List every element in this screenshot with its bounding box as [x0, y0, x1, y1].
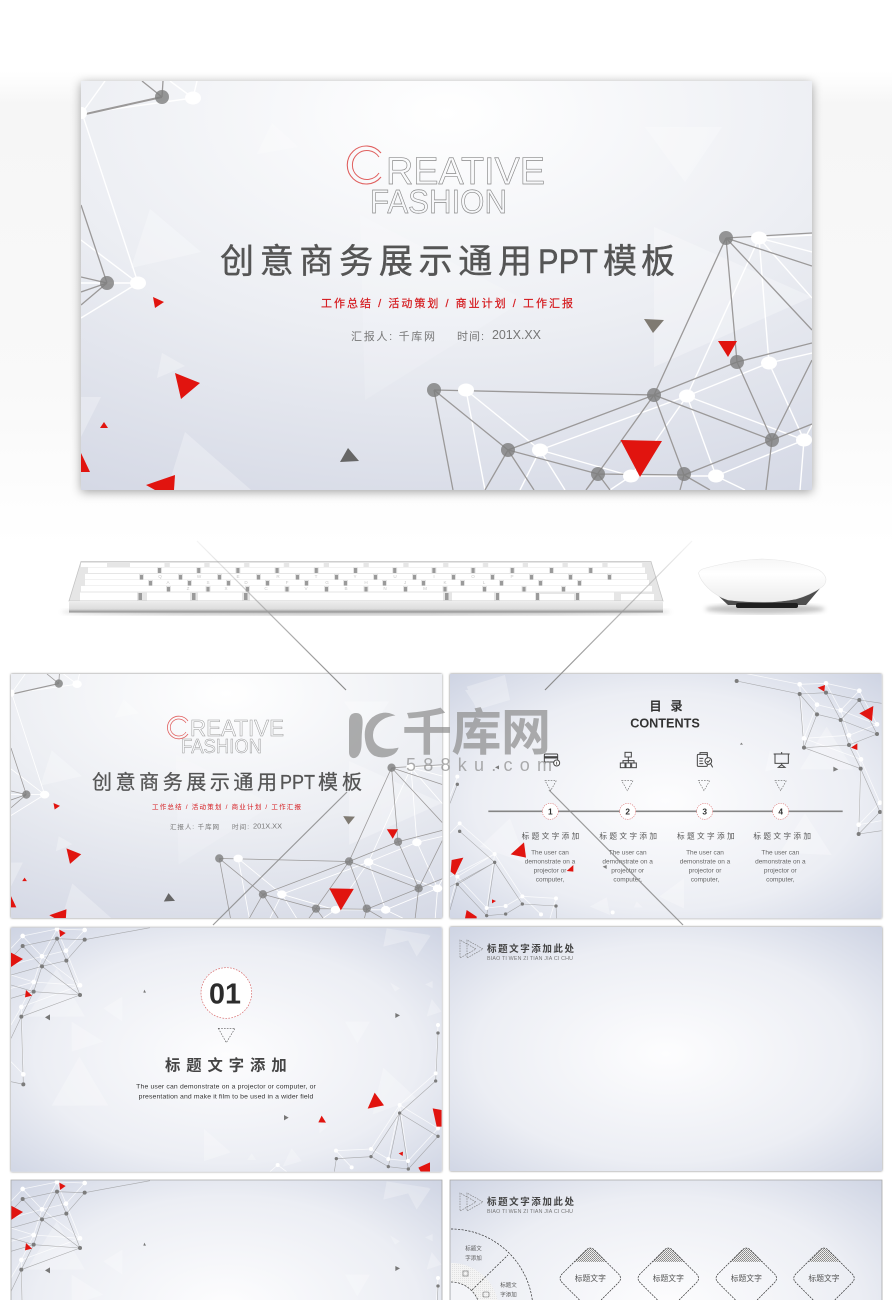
- step descriptions: The user can: [609, 849, 647, 856]
- step headings: [522, 831, 811, 841]
- key labels: J: [404, 580, 406, 585]
- step descriptions: demonstrate on a: [680, 858, 731, 865]
- panel: main cover slide: [77, 81, 812, 490]
- diamond cards: 标题文字: [731, 1273, 762, 1283]
- key labels: F: [286, 580, 289, 585]
- key labels: S: [206, 580, 210, 585]
- fan diagram: [451, 1229, 532, 1300]
- key labels: W: [197, 574, 202, 579]
- logo: Creative Fashion: REATIVE: [386, 151, 545, 193]
- diamond cards: 标题文字: [808, 1273, 840, 1283]
- watermark: [349, 705, 552, 775]
- thumbnail title: [92, 771, 362, 794]
- step descriptions: demonstrate on a: [525, 858, 576, 865]
- timeline: 3: [702, 806, 707, 816]
- key labels: I: [433, 574, 435, 579]
- watermark line right upper: [545, 541, 692, 690]
- section number: 01: [209, 979, 241, 1011]
- thumbnail reporter and date: 201X.XX: [253, 822, 282, 830]
- thumbnail subtitle: 工作总结 / 活动策划 / 商业计划 / 工作汇报: [152, 802, 302, 811]
- title: [220, 243, 675, 281]
- thumbnail artwork: [9, 674, 442, 918]
- contents heading: 目录: [649, 699, 683, 713]
- key labels: G: [325, 580, 329, 585]
- reporter and date: [351, 328, 542, 343]
- network background artwork: [77, 81, 812, 490]
- key labels: Y: [353, 574, 357, 579]
- dashed triangle markers: [545, 781, 786, 791]
- watermark line left lower: [213, 792, 347, 925]
- illustration: mouse: [698, 559, 826, 614]
- icon: double triangle: [460, 1193, 483, 1211]
- key labels: L: [483, 580, 486, 585]
- thumbnail logo: [167, 715, 284, 758]
- fan diagram: 字添加: [500, 1290, 517, 1298]
- panel: thumbnail cover slide: [9, 674, 442, 918]
- panel: section 01 slide: [11, 927, 442, 1172]
- top border: [11, 1180, 442, 1300]
- icon: presentation screen: [774, 752, 790, 767]
- step headings: 标题文字添加: [599, 831, 657, 841]
- thumbnail logo: FASHION: [181, 736, 262, 758]
- icon: card with badge: [544, 754, 560, 766]
- thumbnail title: 模板: [318, 771, 362, 794]
- key labels: B: [344, 586, 348, 591]
- step descriptions: projector or: [534, 867, 567, 874]
- key labels: P: [510, 574, 514, 579]
- network artwork: [11, 1180, 442, 1300]
- step headings: 标题文字添加: [677, 831, 735, 841]
- step descriptions: projector or: [689, 867, 722, 874]
- step headings: 标题文字添加: [753, 831, 811, 841]
- watermark logo: [349, 713, 363, 758]
- timeline: 2: [625, 806, 630, 816]
- key labels: U: [393, 574, 397, 579]
- slide pinyin: BIAO TI WEN ZI TIAN JIA CI CHU: [487, 1209, 573, 1215]
- panel: blank title slide: [450, 927, 882, 1171]
- icon: document and magnifier: [697, 753, 713, 767]
- logo: Creative Fashion: [347, 146, 545, 220]
- step descriptions: demonstrate on a: [755, 858, 806, 865]
- slide title: 标题文字添加此处: [487, 1196, 574, 1208]
- fan diagram: 标题文: [500, 1281, 517, 1289]
- section description: presentation and make it film to be used in a wider field: [139, 1093, 314, 1100]
- key labels: K: [443, 580, 447, 585]
- step descriptions: computer,: [691, 876, 719, 883]
- timeline: 1: [548, 806, 553, 816]
- illustration: keyboard: [61, 562, 671, 615]
- key labels: [158, 574, 514, 591]
- network artwork: [11, 927, 442, 1172]
- key labels: T: [315, 574, 318, 579]
- step descriptions: computer,: [613, 876, 642, 883]
- step descriptions: computer,: [536, 876, 564, 883]
- thumbnail logo: REATIVE: [190, 715, 284, 741]
- section number: [201, 968, 252, 1018]
- slide title: 标题文字添加此处: [487, 943, 574, 955]
- section title: 标题文字添加: [165, 1056, 287, 1074]
- title: 模板: [603, 243, 675, 281]
- slide border: [450, 1180, 882, 1300]
- step descriptions: The user can: [686, 849, 724, 856]
- timeline: 4: [778, 806, 783, 816]
- logo: Creative Fashion: FASHION: [370, 183, 507, 220]
- diamond cards: 标题文字: [575, 1273, 606, 1283]
- step descriptions: computer,: [766, 876, 795, 883]
- watermark url: 588ku.com: [406, 755, 552, 775]
- key labels: N: [383, 586, 387, 591]
- step descriptions: projector or: [611, 867, 645, 874]
- thumbnail title: PPT: [280, 772, 315, 794]
- reporter and date: 时间:: [457, 330, 484, 343]
- key labels: R: [276, 574, 280, 579]
- thumbnail reporter and date: [170, 822, 282, 831]
- fan diagram: 字添加: [465, 1254, 482, 1262]
- key labels: C: [264, 586, 268, 591]
- title: 创意商务展示通用: [220, 243, 532, 281]
- key labels: H: [364, 580, 368, 585]
- watermark line right lower: [549, 790, 683, 925]
- slide pinyin: BIAO TI WEN ZI TIAN JIA CI CHU: [487, 956, 573, 962]
- step headings: 标题文字添加: [522, 831, 579, 841]
- step descriptions: [525, 849, 806, 883]
- watermark line left upper: [197, 541, 346, 690]
- step descriptions: The user can: [531, 849, 569, 856]
- reporter and date: 汇报人: 千库网: [351, 329, 435, 343]
- fan diagram: 标题文: [465, 1244, 482, 1252]
- thumbnail reporter and date: 时间:: [232, 822, 249, 831]
- thumbnail reporter and date: 汇报人: 千库网: [170, 822, 219, 831]
- title: PPT: [538, 243, 598, 281]
- section description: [136, 1084, 317, 1100]
- subtitle: 工作总结 / 活动策划 / 商业计划 / 工作汇报: [321, 296, 573, 310]
- panel: contents slide: [450, 672, 882, 918]
- key labels: V: [304, 586, 308, 591]
- key labels: A: [166, 580, 170, 585]
- key labels: Z: [187, 586, 190, 591]
- key labels: D: [244, 580, 248, 585]
- reporter and date: 201X.XX: [492, 328, 542, 342]
- key labels: Q: [158, 574, 162, 579]
- key labels: E: [236, 574, 240, 579]
- step numbers: [542, 803, 789, 819]
- watermark name: 千库网: [402, 705, 551, 761]
- icon: organisation chart: [620, 752, 636, 768]
- step descriptions: demonstrate on a: [602, 858, 653, 865]
- step descriptions: The user can: [761, 849, 800, 856]
- panel: bottom right slide: [450, 1180, 882, 1300]
- diamond cards: [560, 1248, 854, 1300]
- icon: double triangle: [460, 940, 483, 958]
- dashed triangle: [218, 1028, 235, 1043]
- contents subheading: CONTENTS: [630, 716, 700, 730]
- step descriptions: projector or: [764, 867, 798, 874]
- thumbnail title: 创意商务展示通用: [92, 771, 277, 794]
- panel: bottom left slide: [11, 1180, 442, 1300]
- section description: The user can demonstrate on a projector or computer, or: [136, 1084, 317, 1091]
- timeline: [488, 803, 843, 819]
- key labels: O: [471, 574, 475, 579]
- key labels: X: [224, 586, 228, 591]
- diamond cards: 标题文字: [653, 1273, 684, 1283]
- key labels: M: [423, 586, 427, 591]
